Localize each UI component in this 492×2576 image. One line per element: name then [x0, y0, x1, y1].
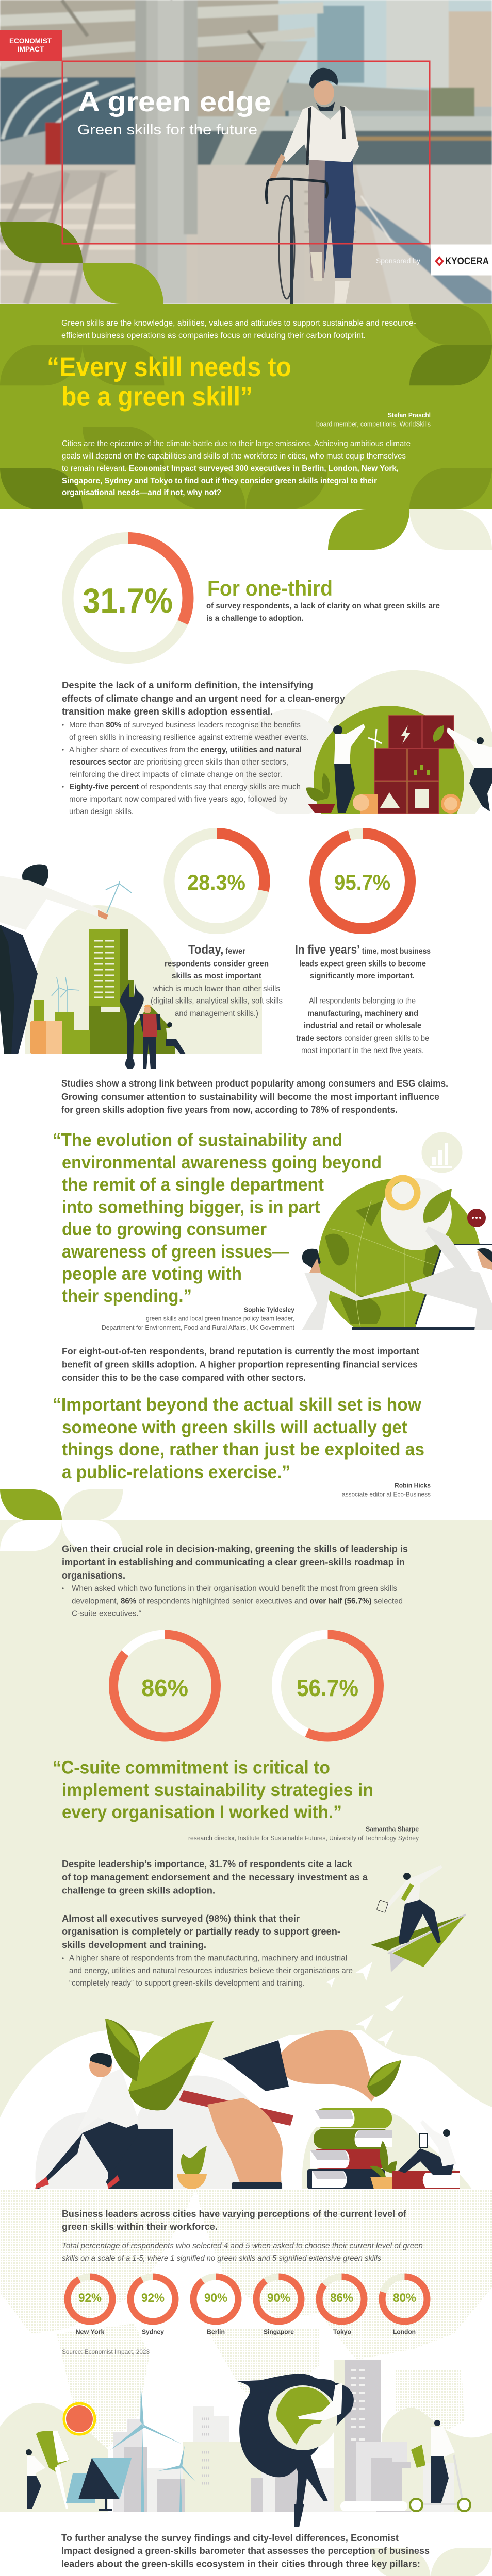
text: studies show: for green skills adoption five years from now, according to 78% of respondents.: [61, 1105, 398, 1115]
donut: 31.7%: [68, 538, 188, 658]
text: barometer intro: leaders about the green-skills ecosystem in their cities through three key pillars:: [61, 2558, 420, 2569]
bullet list: reinforcing the direct impacts of climate change on the sector.: [69, 770, 282, 779]
tower: [34, 929, 175, 1054]
crate stack: [374, 716, 454, 814]
pull quote: evolution of sustainability: environmental awareness going beyond: [62, 1153, 382, 1173]
text: crucial role: When asked which two functions in their organisation would benefit the most from green skills: [72, 1584, 397, 1593]
bicycle: [266, 178, 327, 304]
pull quote: important beyond skill set: [53, 1395, 424, 1482]
leaf: hero light: [83, 263, 163, 304]
worker: [139, 1005, 161, 1069]
attribution: Samantha Sharpe: research director, Institute for Sustainable Futures, University of Technology Sydney: [188, 1834, 419, 1842]
city donut: Berlin: 90%: [204, 2291, 227, 2305]
subtitle: Green skills for the future: [77, 122, 257, 138]
city donut: Singapore: [256, 2277, 301, 2336]
text: in five years: significantly more important.: [310, 972, 415, 980]
text: crucial role: important in establishing and communicating a clear green-skills roadmap in: [62, 1557, 405, 1567]
text: varying perceptions: Business leaders across cities have varying perceptions of the current level of: [62, 2209, 407, 2219]
pull quote: evolution of sustainability: the remit of a single department: [62, 1175, 324, 1195]
brand tag: [0, 30, 62, 61]
text: in five years: industrial and retail or wholesale: [304, 1021, 421, 1030]
text: leadership importance: [62, 1859, 368, 1896]
city donut: London: [382, 2277, 427, 2336]
text: crucial role: development, 86% of respondents highlighted senior executives and over half (56.7%) selected: [72, 1597, 403, 1605]
left person: [302, 1249, 321, 1270]
paragraph: goals will depend on the capabilities and skills of the workforce in cities, who must equip themselves: [62, 452, 406, 461]
text: barometer intro: To further analyse the survey findings and city-level differences, Economist: [61, 2533, 399, 2543]
donut: 31.7%: 31.7%: [83, 581, 173, 620]
stat: for one-third: For one-third: [207, 576, 333, 600]
donut: 56.7%: [276, 1634, 379, 1737]
city donut: Tokyo: [319, 2277, 364, 2336]
text: in five years: most important in the next five years.: [301, 1046, 424, 1055]
text: leadership importance: of top management endorsement and the necessary investment as a: [62, 1872, 368, 1883]
intro text: efficient business operations as companies focus on reducing their carbon footprint.: [61, 331, 366, 340]
sitting man: [35, 2053, 173, 2189]
illustration: man on paper plane: [326, 1865, 466, 2046]
coin stack: [30, 1021, 62, 1054]
quote attribution: board member, competitions, WorldSkills: [316, 420, 431, 428]
quote attribution: [316, 411, 431, 428]
bullet list: Eighty-five percent of respondents say that energy skills are much: [69, 783, 301, 791]
text: in five years: [295, 943, 431, 1055]
text: varying perceptions: skills on a scale of a 1-5, where 1 signified no green skills and 5 signified extensive green skills: [62, 2254, 381, 2263]
pull quote: evolution of sustainability: into something bigger, is in part: [62, 1197, 320, 1217]
text: in five years: All respondents belonging to the: [309, 996, 416, 1006]
city donut: New York: [68, 2277, 112, 2336]
text: eight-out-of-ten: [62, 1346, 419, 1383]
text: studies show: [61, 1078, 448, 1115]
solar panels: [66, 2458, 132, 2511]
right person: [447, 727, 492, 768]
woman hugging globe: [237, 2374, 354, 2504]
upper hand: [281, 2030, 375, 2102]
red frame: [62, 61, 430, 244]
city donut: Tokyo: 86%: [330, 2291, 353, 2305]
lightning person: [26, 2431, 70, 2509]
city donut: Berlin: [193, 2277, 238, 2336]
potted plant: [177, 2146, 207, 2189]
text: today: Today, fewer: [188, 943, 245, 957]
plant on books: [370, 2141, 400, 2189]
pull quote: [47, 352, 291, 412]
illustration: clean energy city: [0, 2360, 492, 2512]
pull quote: evolution of sustainability: “The evolution of sustainability and: [53, 1130, 342, 1150]
city buildings: [113, 2360, 454, 2512]
city donut: London: 80%: [393, 2291, 416, 2305]
text: in five years: trade sectors consider green skills to be: [296, 1034, 429, 1043]
leaf in hand: [367, 2060, 401, 2097]
illustration: green city with giant worker: [0, 864, 262, 1069]
leaf: hero dark: [0, 222, 83, 263]
quote attribution: Stefan Praschl: [388, 411, 431, 419]
text: almost all executives: Almost all executives surveyed (98%) think that their: [62, 1913, 300, 1924]
text: crucial role: C-suite executives.“: [72, 1609, 141, 1618]
stat: for one-third: of survey respondents, a lack of clarity on what green skills are: [206, 602, 440, 611]
bullet list: urban design skills.: [69, 807, 134, 816]
pull quote: C-suite commitment: “C-suite commitment is critical to: [53, 1758, 330, 1777]
hero section: [0, 0, 492, 304]
bullet list: More than 80% of surveyed business leaders recognise the benefits: [69, 721, 301, 730]
text: today: [151, 943, 283, 1018]
pull quote: evolution of sustainability: people are voting with: [62, 1264, 242, 1284]
small turbines: [52, 977, 79, 1012]
heading: uniform definition: transition make green skills adoption essential.: [62, 706, 273, 717]
city donut: Sydney: Sydney: [142, 2328, 165, 2336]
wrench: [120, 983, 144, 1069]
attribution: Samantha Sharpe: [188, 1825, 419, 1842]
heading: uniform definition: Despite the lack of a uniform definition, the intensifying: [62, 680, 313, 690]
attribution: Sophie Tyldesley: Sophie Tyldesley: [244, 1306, 295, 1314]
text: varying perceptions: green skills within their workforce.: [62, 2222, 218, 2232]
attribution: Sophie Tyldesley: green skills and local green finance policy team leader,: [146, 1315, 294, 1323]
paragraph: organisational needs—and if not, why not?: [62, 488, 221, 497]
city donut: New York: New York: [75, 2328, 105, 2336]
illustration: leaf pencil, books and people: [0, 2019, 492, 2189]
brand tag: IMPACT: [18, 45, 44, 53]
intro text: Green skills are the knowledge, abilities, values and attitudes to support sustainable and resource-: [61, 319, 416, 328]
attribution: Robin Hicks: [342, 1482, 431, 1498]
pull quote: important beyond skill set: someone with green skills will actually get: [62, 1417, 407, 1437]
city donut: Singapore: Singapore: [264, 2328, 294, 2336]
text: almost all executives: [62, 1913, 353, 1988]
pull quote: evolution of sustainability: their spending.”: [62, 1286, 192, 1306]
giant person: [0, 864, 132, 1054]
text: crucial role: Given their crucial role in decision-making, greening the skills of leadership is: [62, 1544, 408, 1554]
text: eight-out-of-ten: For eight-out-of-ten respondents, brand reputation is currently the most important: [62, 1346, 419, 1357]
brand tag: ECONOMIST: [9, 37, 52, 45]
heading: uniform definition: [62, 680, 345, 717]
heading: uniform definition: effects of climate change and an urgent need for a clean-energy: [62, 693, 345, 704]
sponsor logo: [431, 244, 492, 275]
city donut: Sydney: [130, 2277, 175, 2336]
pull quote: evolution of sustainability: due to growing consumer: [62, 1219, 267, 1240]
potted plant: [306, 773, 330, 801]
text: today: (digital skills, analytical skills, soft skills: [151, 996, 283, 1006]
stat: for one-third: is a challenge to adoption.: [206, 614, 304, 623]
right person: [410, 1267, 492, 1330]
text: in five years: manufacturing, machinery and: [307, 1009, 418, 1018]
text: barometer intro: [61, 2533, 430, 2569]
pull quote: important beyond skill set: a public-relations exercise.”: [62, 1462, 290, 1482]
attribution: Samantha Sharpe: Samantha Sharpe: [366, 1825, 419, 1833]
attribution: Robin Hicks: associate editor at Eco-Business: [342, 1490, 431, 1498]
pull quote: important beyond skill set: things done, rather than just be exploited as: [62, 1439, 424, 1460]
woman: [270, 68, 359, 304]
city donut: London: London: [393, 2328, 416, 2336]
text: almost all executives: and energy, utilities and natural resources industries believe their organisations are: [69, 1967, 353, 1975]
paragraph: Cities are the epicentre of the climate battle due to their large emissions. Achieving ambitious climate: [62, 439, 411, 448]
lower hand: [207, 2098, 283, 2182]
text: almost all executives: “completely ready” to support green-skills development and training.: [69, 1979, 305, 1988]
text: studies show: Growing consumer attention to sustainability will become the most important influence: [61, 1092, 439, 1102]
bullet list: A higher share of executives from the energy, utilities and natural: [69, 745, 302, 754]
text: today: respondents consider green: [165, 959, 269, 969]
city donut: New York: 92%: [78, 2291, 102, 2305]
paragraph: [62, 439, 411, 497]
text: studies show: Studies show a strong link between product popularity among consumers and ESG claims.: [61, 1078, 448, 1089]
text: eight-out-of-ten: benefit of green skills adoption. A higher proportion representing financial services: [62, 1359, 418, 1369]
coins: [360, 794, 378, 814]
book stack: [307, 2108, 392, 2189]
pencil leaf: [128, 2021, 214, 2110]
panel: leadership background: [0, 1520, 492, 2189]
text: almost all executives: A higher share of respondents from the manufacturing, machinery and industrial: [69, 1954, 347, 1963]
bullet list: more important now compared with five years ago, followed by: [69, 795, 287, 804]
attribution: Sophie Tyldesley: [102, 1306, 295, 1331]
text: varying perceptions: [62, 2209, 423, 2263]
leaf pair: barometer: [370, 2548, 491, 2576]
text: leadership importance: Despite leadership’s importance, 31.7% of respondents cite a lack: [62, 1859, 353, 1869]
city donut: Sydney: 92%: [141, 2291, 165, 2305]
city donut: Tokyo: Tokyo: [333, 2328, 351, 2336]
text: almost all executives: organisation is completely or partially ready to support green-: [62, 1926, 340, 1937]
intro text: [61, 319, 416, 340]
title: A green edge: [78, 87, 271, 117]
source note: Source: Economist Impact, 2023: [62, 2348, 150, 2355]
city donut: Berlin: Berlin: [207, 2328, 225, 2336]
donut: 28.3%: 28.3%: [187, 870, 245, 894]
text: crucial role: organisations.: [62, 1570, 125, 1581]
text: varying perceptions: Total percentage of respondents who selected 4 and 5 when asked to choose their current level of green: [62, 2242, 423, 2250]
attribution: Robin Hicks: Robin Hicks: [395, 1482, 431, 1489]
text: crucial role: [62, 1544, 408, 1618]
laptop person: [166, 1022, 186, 1054]
wind turbines: [110, 2384, 196, 2512]
pencil: [179, 2090, 293, 2126]
donut: 28.3%: [169, 834, 265, 928]
donut: 86%: 86%: [141, 1674, 188, 1701]
sun: [64, 2403, 95, 2434]
text: barometer intro: Impact designed a green-skills barometer that assesses the perception of business: [61, 2546, 430, 2556]
text: leadership importance: challenge to green skills adoption.: [62, 1886, 215, 1896]
icon: bar chart circle: [422, 1132, 462, 1173]
text: in five years: In five years’ time, most business: [295, 943, 431, 957]
city donut: Singapore: 90%: [267, 2291, 290, 2305]
donut: 95.7%: 95.7%: [334, 870, 390, 894]
pull quote: “Every skill needs to: [47, 352, 291, 382]
bullet list: of green skills in increasing resilience against extreme weather events.: [69, 733, 309, 742]
person on book with laptop: [392, 2120, 460, 2189]
pull quote: C-suite commitment: every organisation I worked with.”: [62, 1802, 342, 1822]
text: almost all executives: skills development and training.: [62, 1940, 206, 1950]
bullet list: [62, 721, 309, 816]
leaf cluster: leadership: [0, 1489, 123, 1551]
hero photo: woman with bicycle: [0, 0, 492, 304]
dotted world map background: [0, 2189, 492, 2452]
wind turbine: [368, 729, 382, 748]
left person: [333, 725, 342, 735]
pull quote: C-suite commitment: implement sustainability strategies in: [62, 1780, 373, 1800]
donut: 95.7%: [315, 834, 411, 928]
pull quote: C-suite commitment: [53, 1758, 373, 1822]
illustration: globe handshake: [302, 1178, 492, 1341]
leaf pair: below intro: [328, 509, 492, 550]
attribution: Sophie Tyldesley: Department for Environment, Food and Rural Affairs, UK Government: [102, 1324, 294, 1331]
text: in five years: leads expect green skills to become: [299, 959, 426, 969]
sponsor credit: Sponsored by: [376, 257, 420, 265]
donut: 56.7%: 56.7%: [297, 1674, 358, 1701]
paragraph: to remain relevant. Economist Impact surveyed 300 executives in Berlin, London, New York,: [62, 464, 399, 473]
woman's legs below the ground line: [294, 2504, 304, 2527]
laptop screen: [416, 1245, 481, 1327]
illustration: building blocks: [240, 670, 492, 814]
upper sleeve: [223, 2040, 289, 2091]
bullet list: resources sector are prioritising green skills than other sectors,: [69, 758, 288, 767]
pull quote: important beyond skill set: “Important beyond the actual skill set is how: [53, 1395, 422, 1415]
text: today: which is much lower than other skills: [153, 985, 280, 993]
text: eight-out-of-ten: consider this to be the case compared with other sectors.: [62, 1372, 306, 1383]
donut: 86%: [113, 1634, 216, 1737]
paragraph: Singapore, Sydney and Tokyo to find out if they consider green skills integral to their: [62, 477, 377, 485]
text: today: and management skills.): [175, 1009, 258, 1018]
text: today: skills as most important: [172, 972, 262, 980]
stat: for one-third: [206, 576, 440, 623]
scooter man: [410, 2420, 470, 2511]
pull quote: evolution of sustainability: [53, 1130, 382, 1306]
pull quote: be a green skill”: [61, 381, 253, 412]
pull quote: evolution of sustainability: awareness of green issues—: [62, 1242, 289, 1262]
panel: intro green: [0, 304, 492, 509]
